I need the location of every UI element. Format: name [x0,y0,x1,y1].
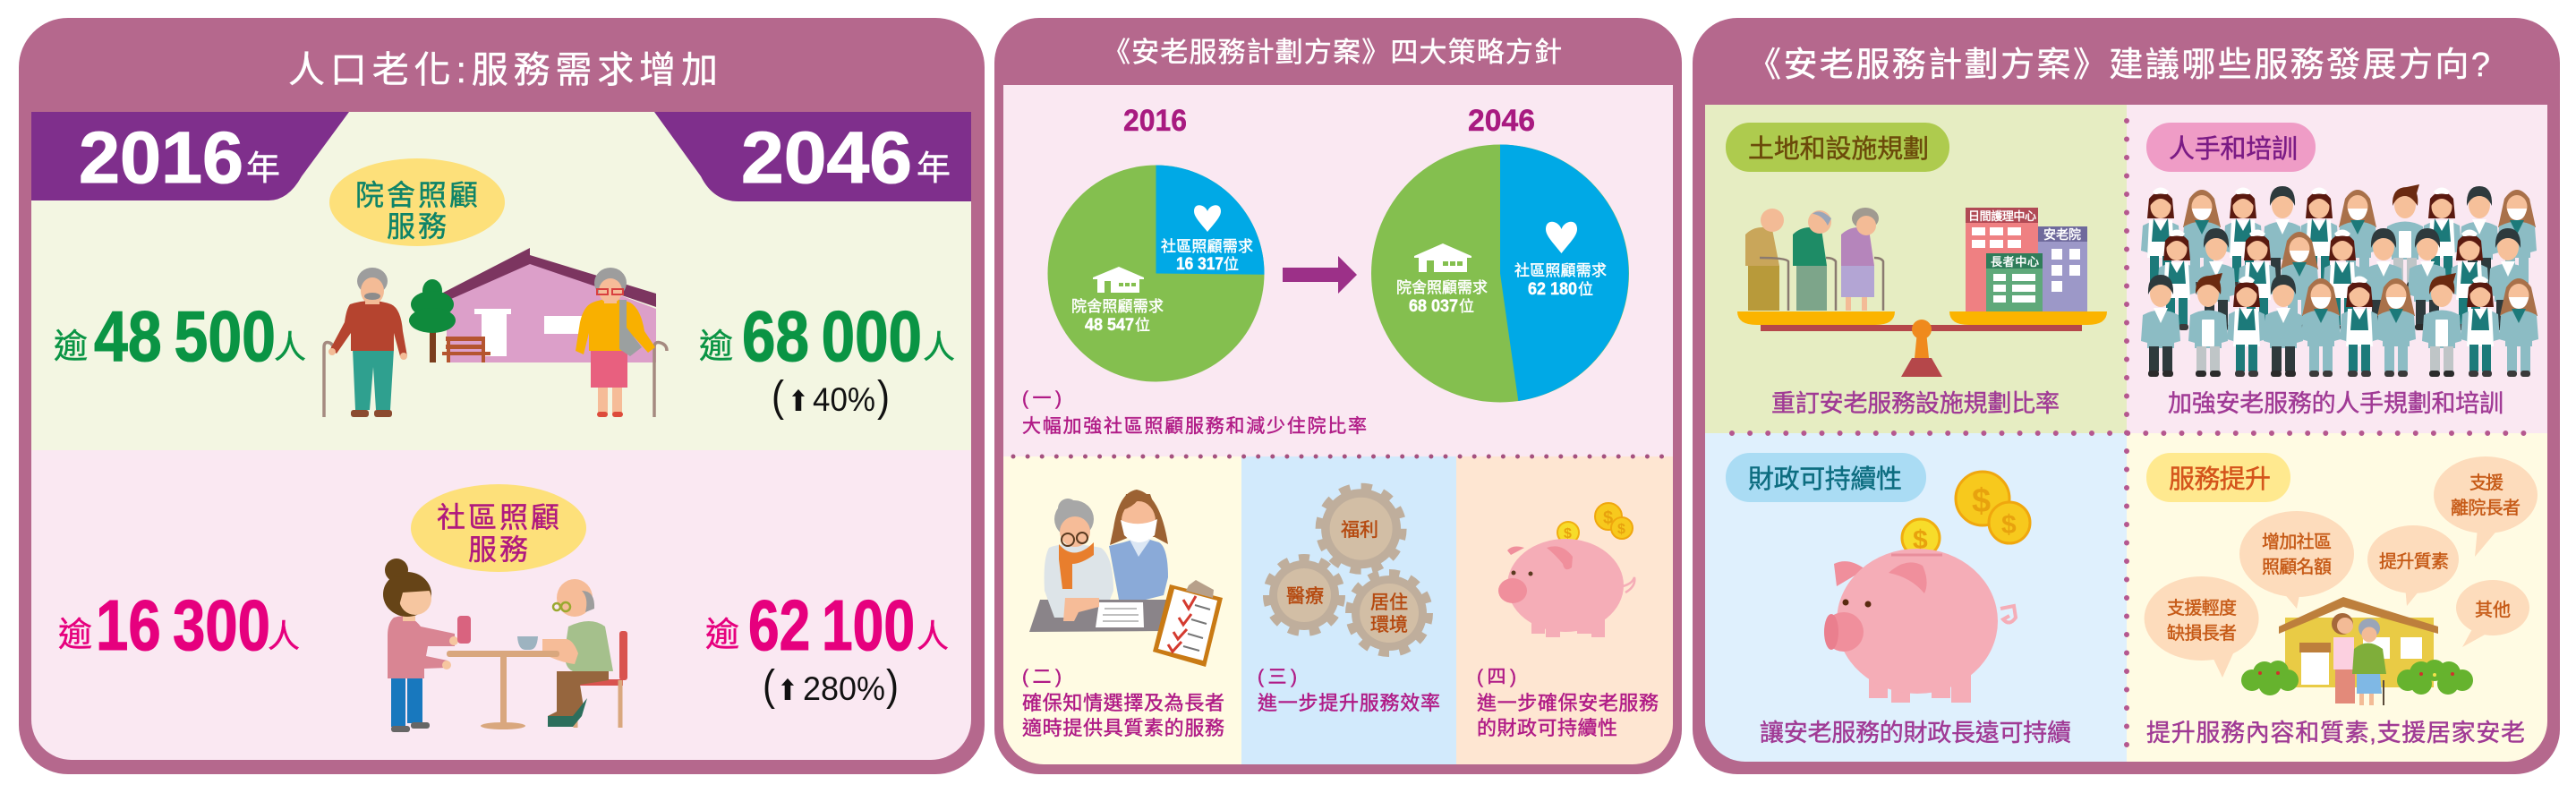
stat: community 2016: 人 [268,618,300,654]
year tab 2046: 年 [917,150,951,188]
elders with walkers [1745,208,1883,311]
stat: community 2046: 逾 [705,617,739,654]
year tab 2046: 2046 [741,117,912,199]
carer in mask [1109,490,1168,600]
label: community demand 2046 [1514,262,1607,299]
bubble: improve quality [2367,525,2459,606]
stat: community 2016: 逾 [58,617,92,654]
illustration: ageing at home [2241,597,2473,705]
gear: medical [1267,559,1341,632]
strategy one text [1022,388,1367,437]
stat: residential 2046: 逾 [699,328,733,366]
illustration: large piggy bank [1824,472,2030,703]
bubble: improve quality: 提升質素 [2379,551,2449,572]
pie chart 2046 [1371,145,1629,403]
caption: manpower planning: 加強安老服務的人手規劃和培訓 [2168,390,2503,417]
stat: community increase 280%: ) [886,662,899,710]
strategy four text: 進一步確保安老服務 [1477,692,1659,714]
year tab 2016: 年 [246,150,280,188]
label: community demand 2046: 社區照顧需求 [1514,262,1607,279]
icon: care home [1414,243,1471,272]
bubble: support discharged elders: 離院長者 [2451,498,2521,518]
label: residential demand 2016: 位 [1135,317,1150,334]
illustration: care home with elderly couple [324,248,667,417]
stat: residential increase 40%: 40% [813,381,875,418]
bench [442,337,490,362]
stat: community increase 280%: 280% [803,670,885,707]
illustration: balance scale [1737,208,2107,377]
stat: residential 2016: 逾 [54,328,88,366]
pie chart 2016 [1047,165,1265,381]
badge: residential care [329,158,505,246]
bubble: support discharged elders [2434,456,2538,557]
bubble: more community places: 增加社區 [2262,532,2332,552]
label: residential demand 2046: 位 [1459,298,1474,315]
year label 2016: 2016 [1123,104,1187,138]
strategy four text [1477,667,1659,739]
paper [1096,602,1144,627]
badge: community care [411,484,586,572]
stat: residential increase 40%: ⬆ [788,384,809,418]
chair [574,631,627,728]
strategy three text: 進一步提升服務效率 [1258,692,1440,714]
strategy three text: (三) [1258,667,1297,687]
illustration: small piggy bank: $ [1617,522,1625,537]
right pan [1949,311,2107,325]
strategy two text: 確保知情選擇及為長者 [1022,692,1224,714]
stat: residential 2016: 人 [274,328,306,365]
left pan [1737,311,1895,325]
label: residential demand 2016 [1071,298,1164,335]
year tab 2046 [654,112,971,201]
gear: living environment [1350,574,1429,652]
tree [409,279,456,362]
illustration: small piggy bank: $ [1564,526,1572,541]
house [443,248,656,362]
carer [2332,613,2355,703]
label: community demand 2016 [1161,238,1253,274]
bubble: others: 其他 [2475,600,2511,620]
elder with cane [2352,618,2386,705]
year tab 2016: 2016 [79,117,243,199]
icon: heart [1194,205,1221,232]
strategy two text: (二) [1022,667,1062,687]
stat: residential increase 40%: ) [877,373,890,421]
label: community demand 2016: 社區照顧需求 [1161,238,1253,255]
strategy four text: (四) [1477,667,1516,687]
heading: recommended directions: 《安老服務計劃方案》建議哪些服務發展方向? [1747,47,2490,84]
strategy two text [1022,667,1224,739]
label: community demand 2016: 16 317 [1176,255,1224,274]
pill: service enhancement: 服務提升 [2169,465,2271,494]
stat: community 2046: 人 [917,618,949,654]
arrow: 2016 to 2046 [1283,256,1357,294]
label: residential demand 2046: 院舍照顧需求 [1396,279,1488,296]
badge: community care: 服務 [468,533,528,566]
caption: financial sustainability: 讓安老服務的財政長遠可持續 [1760,720,2071,746]
bubble: more community places: 照顧名額 [2262,557,2332,577]
stat: community 2046: 62 100 [748,585,915,665]
illustration: small piggy bank [1498,503,1634,637]
gear: living environment: 居住 [1370,593,1408,613]
bubble: support frail elders: 缺損長者 [2167,623,2237,644]
bubble: support frail elders: 支援輕度 [2167,598,2237,618]
icon: heart [1546,222,1577,253]
stat: residential 2046: 68 000 [742,296,922,376]
carer [383,559,471,732]
table [447,651,559,729]
strategy one text: 大幅加強社區照顧服務和減少住院比率 [1022,416,1367,437]
badge: community care: 社區照顧 [437,501,559,533]
service buildings: 日間護理中心 [1968,209,2036,223]
home [2279,597,2438,687]
pill: manpower and training: 人手和培訓 [2169,134,2298,164]
stat: residential 2046: 人 [923,328,955,365]
elderly man with cane [324,268,407,417]
label: community demand 2016: 位 [1224,256,1239,273]
illustration: large piggy bank: $ [1913,525,1928,555]
scale base and beam [1761,320,2082,377]
illustration: informed choice [1029,490,1223,667]
year label 2046: 2046 [1468,104,1535,138]
bushes [2241,660,2473,695]
stat: residential 2016: 48 500 [94,296,276,376]
badge: residential care: 院舍照顧 [355,179,478,211]
pill: land and facilities: 土地和設施規劃 [1748,134,1929,164]
pill: financial sustainability [1726,453,1926,502]
heading: four strategic directions: 《安老服務計劃方案》四大策略方針 [1103,37,1562,68]
label: community demand 2046: 62 180 [1528,280,1577,299]
illustration: gears [1267,488,1429,652]
elderly woman [1045,499,1113,621]
illustration: large piggy bank: $ [2001,510,2017,540]
illustration: small piggy bank: $ [1603,508,1613,528]
panel: population ageing [19,18,985,774]
pill: manpower and training [2146,123,2316,172]
label: community demand 2046: 位 [1578,281,1593,298]
panel: four strategic directions [994,18,1682,774]
label: residential demand 2046: 68 037 [1409,297,1458,316]
label: residential demand 2016: 院舍照顧需求 [1071,298,1164,315]
elderly woman with cane [576,268,667,417]
caption: service enhancement: 提升服務內容和質素,支援居家安老 [2146,720,2525,746]
strategy two text: 適時提供具質素的服務 [1022,717,1224,739]
stat: community increase 280%: ( [763,662,775,710]
label: residential demand 2046 [1396,279,1488,316]
table [1029,600,1172,632]
stat: community 2016: 16 300 [96,585,270,665]
stat: community increase 280% [763,662,899,710]
pill: land and facilities [1726,123,1949,172]
service buildings: 安老院 [2043,227,2081,242]
gear: welfare [1320,488,1403,570]
elderly man [542,579,613,727]
cup [517,636,538,650]
stat: residential increase 40% [772,373,890,421]
gear: welfare: 福利 [1341,520,1378,541]
strategy one text: (一) [1022,388,1062,409]
pill: service enhancement [2146,453,2290,502]
strategy three text [1258,667,1440,714]
service buildings [1966,208,2087,311]
illustration: care staff crowd [2141,184,2538,377]
caption: facility ratio: 重訂安老服務設施規劃比率 [1771,390,2060,417]
clipboard checklist [1153,580,1223,667]
heading: population ageing: 人口老化:服務需求增加 [288,49,718,90]
bubble: support frail elders [2145,576,2259,678]
gear: living environment: 環境 [1370,615,1408,635]
gear: medical: 醫療 [1286,586,1324,607]
stat: residential increase 40%: ( [772,373,784,421]
pill: financial sustainability: 財政可持續性 [1748,465,1902,494]
icon: care home [1093,267,1144,293]
bubble: others [2456,580,2529,647]
stat: community increase 280%: ⬆ [777,673,798,707]
strategy four text: 的財政可持續性 [1477,717,1617,739]
bubble: more community places [2239,511,2354,609]
badge: residential care: 服務 [387,210,447,243]
illustration: large piggy bank: $ [1972,482,1991,520]
illustration: carer serving elderly man [383,559,627,732]
bubble: support discharged elders: 支援 [2469,473,2503,493]
label: residential demand 2016: 48 547 [1085,316,1134,335]
panel: recommended service directions [1693,18,2560,774]
year tab 2016 [31,112,349,200]
service buildings: 長者中心 [1991,255,2039,269]
